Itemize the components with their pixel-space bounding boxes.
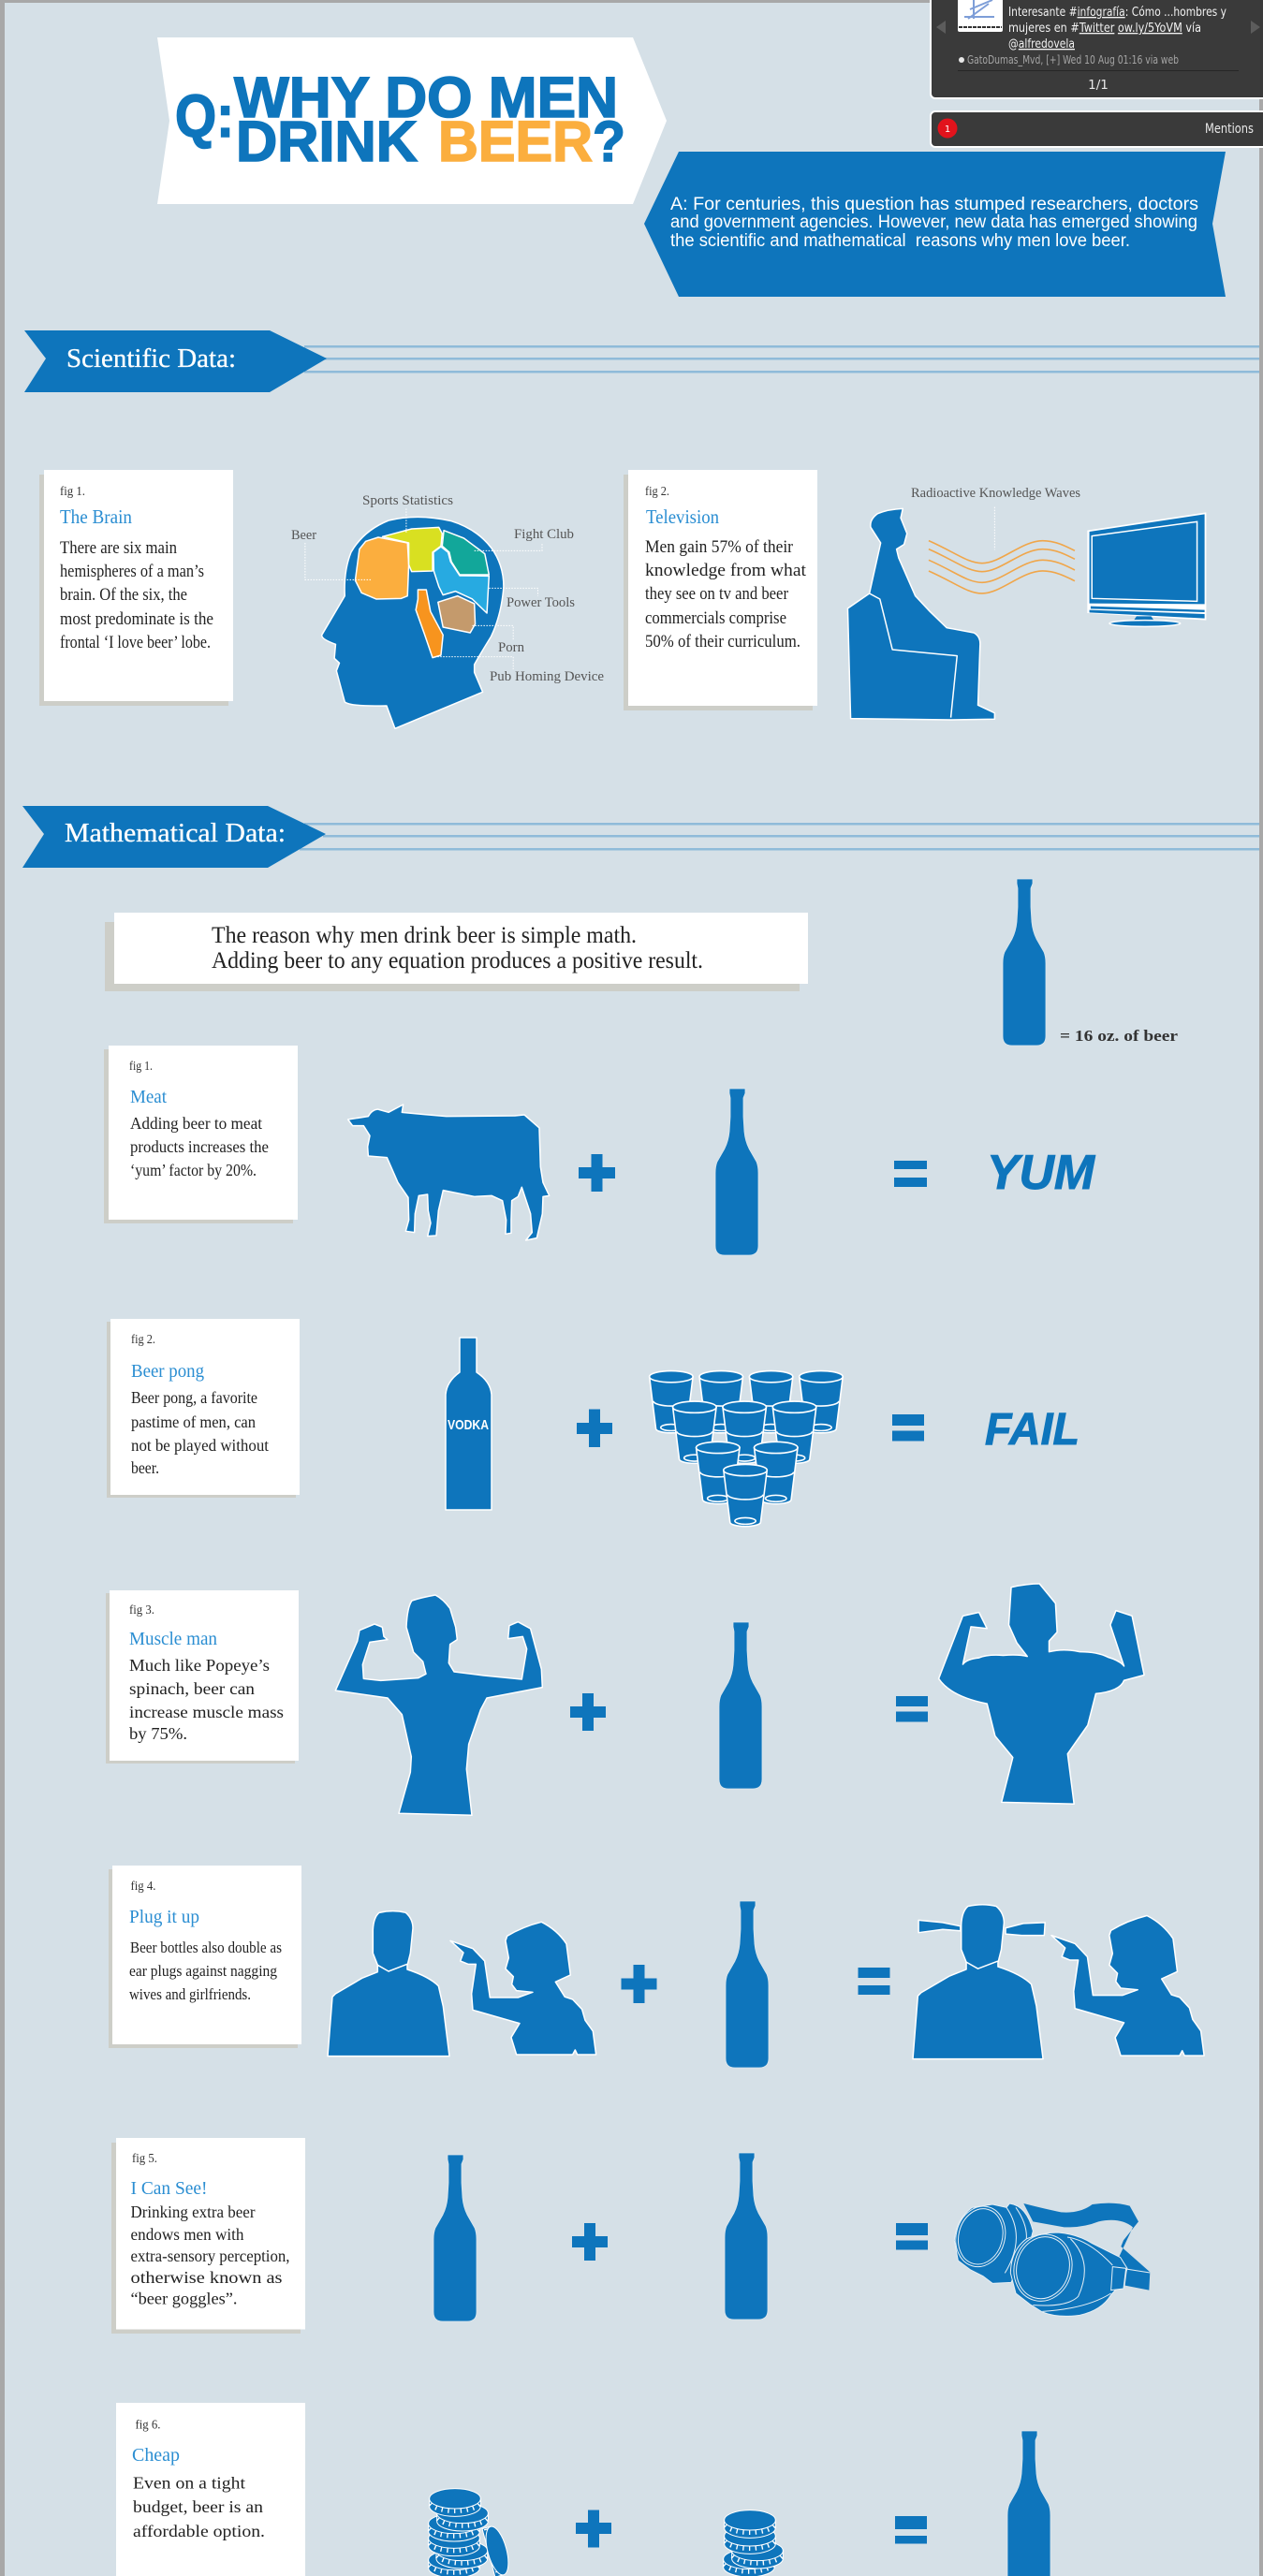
panel: fig 4 plug it up (109, 1866, 301, 2048)
panel: television text: 50% of their curriculum. (645, 632, 800, 651)
icon: bottle (726, 1901, 769, 2068)
answer banner (644, 152, 1226, 297)
panel: fig 1 meat: Adding beer to meat (130, 1114, 262, 1133)
brain labels: Porn (498, 640, 524, 655)
panel: television text: fig 2. (645, 485, 669, 499)
panel: fig 1 meat: products increases the (130, 1137, 269, 1156)
brain labels: Beer (291, 528, 316, 543)
panel: fig 6 cheap: budget, beer is an (133, 2497, 263, 2516)
icon: vodka bottle (446, 1338, 492, 1510)
callout: simple math: The reason why men drink beer is simple math. (212, 923, 637, 948)
panel: the brain text: most predominate is the (60, 609, 213, 629)
tweet text: @alfredovela (1008, 37, 1075, 51)
icon: bottle (719, 1622, 762, 1789)
panel: fig 4 plug it up: Plug it up (129, 1907, 199, 1927)
panel: fig 6 cheap (116, 2403, 305, 2576)
knowledge waves (929, 541, 1075, 593)
legend label: = 16 oz. of beer (1060, 1027, 1179, 1045)
tweet text: Interesante #infografía: Cómo ...hombres y (1008, 5, 1226, 20)
section rules: scientific (304, 345, 1259, 373)
panel: fig 5 I can see: otherwise known as (131, 2268, 283, 2287)
answer text: the scientific and mathematical reasons why men love beer. (670, 231, 1130, 251)
panel: fig 2 beer pong: not be played without (131, 1436, 269, 1455)
panel: fig 3 muscle man: spinach, beer can (129, 1679, 255, 1698)
panel: fig 6 cheap: fig 6. (135, 2419, 161, 2432)
tweet text: mujeres en #Twitter ow.ly/5YoVM vía (1008, 21, 1201, 36)
section rules: mathematical (300, 823, 1259, 850)
panel: fig 6 cheap: affordable option. (133, 2522, 265, 2540)
answer text: A: For centuries, this question has stumped researchers, doctors (670, 195, 1198, 214)
title text: Q: (175, 82, 234, 150)
panel: fig 1 meat (104, 1046, 298, 1223)
icon: legend bottle (1003, 879, 1046, 1046)
red badge: 1 (945, 124, 950, 135)
equals (858, 1968, 889, 1995)
title text: DRINK (236, 110, 418, 173)
icon: vodka bottle: VODKA (448, 1417, 489, 1433)
plus (622, 1965, 657, 2003)
icon: muscle man flexing (939, 1584, 1144, 1804)
panel: fig 5 I can see: endows men with (131, 2225, 243, 2244)
tweet text (1008, 5, 1226, 51)
title text (175, 66, 625, 173)
tweet meta: GatoDumas_Mvd, [+] Wed 10 Aug 01:16 via web (967, 53, 1179, 66)
icon: bottle (1007, 2431, 1050, 2576)
answer text (670, 195, 1198, 251)
callout: simple math: Adding beer to any equation produces a positive result. (212, 948, 703, 973)
brain labels: Fight Club (514, 527, 574, 542)
pager: 1/1 (1088, 78, 1109, 93)
equals (894, 1161, 927, 1187)
panel: television text: Television (646, 505, 719, 528)
panel: fig 2 beer pong (107, 1319, 300, 1498)
panel: fig 3 muscle man (106, 1590, 299, 1764)
avatar thumbnail (958, 0, 1003, 32)
panel: fig 3 muscle man: Muscle man (129, 1629, 217, 1649)
notification panel: tweet (931, 0, 1263, 98)
panel: television text: they see on tv and beer (645, 584, 789, 604)
panel: the brain text: hemispheres of a man’s (60, 562, 204, 581)
panel: fig 6 cheap: Even on a tight (133, 2473, 245, 2492)
plus (576, 2510, 611, 2548)
brain diagram (291, 493, 604, 728)
television set (1087, 512, 1206, 626)
plus (577, 1410, 612, 1447)
panel: fig 2 beer pong: Beer pong, a favorite (131, 1388, 257, 1407)
plus (572, 2223, 608, 2261)
panel: fig 2 beer pong: beer. (131, 1458, 159, 1477)
panel: television text: knowledge from what (645, 561, 807, 580)
television diagram: Radioactive Knowledge Waves (911, 486, 1080, 501)
icon: man and nagging woman (328, 1911, 596, 2056)
panel: fig 5 I can see: “beer goggles”. (131, 2290, 238, 2308)
panel: television text (624, 470, 817, 710)
brain labels: Sports Statistics (362, 493, 453, 508)
icon: man with bottle ear plugs and woman (913, 1905, 1204, 2059)
panel: fig 4 plug it up: ear plugs against nagging (129, 1962, 277, 1980)
plus (579, 1154, 615, 1192)
icon: thin man flexing (335, 1595, 542, 1815)
panel: fig 1 meat: Meat (130, 1087, 167, 1107)
icon: bottle (725, 2153, 768, 2320)
panel: television text: commercials comprise (645, 608, 786, 628)
brain labels: Power Tools (507, 595, 575, 610)
panel: the brain text (39, 470, 233, 706)
panel: the brain text: frontal ‘I love beer’ lobe. (60, 633, 211, 652)
result: FAIL: FAIL (985, 1405, 1079, 1455)
panel: the brain text: brain. Of the six, the (60, 585, 187, 605)
icon: coin pile with tilted coin (429, 2489, 513, 2576)
carousel arrows (936, 21, 1260, 34)
icon: goggles (949, 2201, 1150, 2316)
icon: cow (348, 1105, 550, 1240)
equals (896, 2223, 928, 2250)
plus (570, 1693, 606, 1731)
panel: fig 2 beer pong: Beer pong (131, 1361, 204, 1382)
callout: simple math (105, 913, 808, 991)
section heading: Scientific Data (24, 330, 327, 392)
panel: fig 1 meat: ‘yum’ factor by 20%. (130, 1161, 257, 1179)
equals (895, 2516, 927, 2544)
panel: fig 3 muscle man: fig 3. (129, 1603, 154, 1617)
section heading: Scientific Data: Scientific Data: (66, 344, 236, 373)
panel: fig 5 I can see (111, 2138, 305, 2334)
title text: WHY DO MEN (234, 66, 618, 129)
panel: fig 3 muscle man: by 75%. (129, 1724, 187, 1743)
panel: fig 4 plug it up: wives and girlfriends. (129, 1985, 251, 2003)
panel: fig 6 cheap: Cheap (132, 2445, 180, 2466)
head silhouette (305, 508, 542, 728)
icon: coin stack (724, 2510, 783, 2576)
title text: BEER (438, 110, 593, 173)
title banner (157, 37, 667, 204)
panel: fig 4 plug it up: Beer bottles also double as (130, 1939, 282, 1956)
section heading: Mathematical Data (22, 806, 326, 868)
panel: fig 5 I can see: fig 5. (132, 2152, 157, 2166)
notification panel: mentions (931, 111, 1263, 147)
icon: beer pong cups (650, 1371, 843, 1527)
icon: bottle (715, 1089, 758, 1255)
panel: fig 3 muscle man: Much like Popeye’s (129, 1656, 270, 1675)
panel: television text: Men gain 57% of their (645, 537, 794, 557)
red badge (938, 118, 957, 139)
notification panel: mentions: Mentions (1205, 122, 1254, 137)
panel: fig 5 I can see: extra-sensory perception, (131, 2247, 290, 2265)
panel: fig 2 beer pong: fig 2. (131, 1333, 155, 1347)
panel: fig 4 plug it up: fig 4. (131, 1880, 155, 1894)
brain labels: Pub Homing Device (490, 669, 604, 684)
icon: bottle (433, 2155, 477, 2321)
panel: fig 3 muscle man: increase muscle mass (129, 1703, 284, 1721)
panel: fig 1 meat: fig 1. (129, 1060, 153, 1074)
television diagram (847, 486, 1206, 720)
panel: the brain text: There are six main (60, 538, 177, 558)
brain labels (291, 493, 604, 684)
panel: the brain text: fig 1. (60, 485, 85, 499)
answer text: and government agencies. However, new data has emerged showing (670, 212, 1197, 232)
equals (896, 1696, 928, 1722)
panel: fig 2 beer pong: pastime of men, can (131, 1412, 256, 1431)
title text: ? (593, 110, 625, 173)
panel: the brain text: The Brain (60, 505, 132, 528)
seated man in chair (847, 508, 994, 720)
panel: fig 5 I can see: Drinking extra beer (131, 2203, 255, 2221)
panel: fig 5 I can see: I Can See! (131, 2178, 208, 2199)
equals (892, 1414, 924, 1442)
result: YUM: YUM (987, 1146, 1096, 1200)
section heading: Mathematical Data: Mathematical Data: (65, 818, 286, 848)
